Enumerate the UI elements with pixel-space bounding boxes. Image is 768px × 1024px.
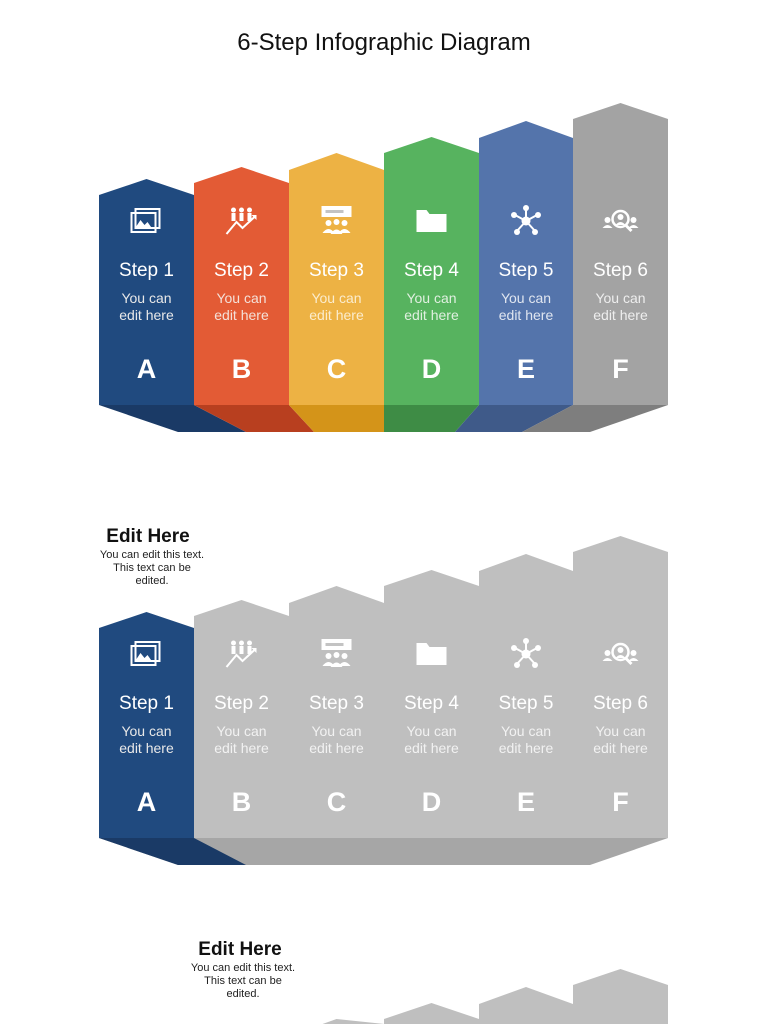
- column 3: C: [327, 787, 346, 817]
- column 6: You can: [595, 290, 646, 306]
- column 4: D: [422, 354, 441, 384]
- column 2: edit here: [214, 307, 269, 323]
- column 5: E: [517, 354, 535, 384]
- callout: edit here (step 2): Edit Here: [198, 939, 282, 960]
- callout: edit here (step 2): You can edit this text.: [191, 962, 295, 974]
- column 4: You can: [406, 290, 457, 306]
- column 5: Step 5: [499, 260, 553, 281]
- bottom shadow band: [99, 838, 668, 865]
- callout: edit here (step 1): edited.: [135, 575, 169, 587]
- column 2: B: [232, 354, 251, 384]
- column 1: Step 1: [119, 693, 174, 714]
- diagram 1: colored steps: [99, 103, 668, 432]
- column 4: [384, 570, 479, 838]
- callout: edit here (step 2): [191, 939, 295, 1000]
- column 3: Step 3: [309, 693, 364, 714]
- column 6: Step 6: [593, 260, 648, 281]
- diagram 3: partially visible: [194, 969, 668, 1024]
- column 3: C: [327, 354, 346, 384]
- column 6: edit here: [593, 307, 648, 323]
- column 2: Step 2: [214, 693, 269, 714]
- column 6: F: [612, 787, 629, 817]
- column 2: You can: [216, 290, 267, 306]
- column 4: [384, 137, 479, 405]
- column 2: You can: [216, 723, 267, 739]
- column 4: D: [422, 787, 441, 817]
- column 3: edit here: [309, 740, 364, 756]
- column 6: edit here: [593, 740, 648, 756]
- column 3: Step 3: [309, 260, 364, 281]
- column 6: You can: [595, 723, 646, 739]
- column 6: Step 6: [593, 693, 648, 714]
- column 5: Step 5: [499, 693, 553, 714]
- title: 6-Step Infographic Diagram: [237, 29, 531, 56]
- column 6: F: [612, 354, 629, 384]
- callout: edit here (step 1): This text can be: [113, 562, 191, 574]
- column 2: edit here: [214, 740, 269, 756]
- column 4: edit here: [404, 307, 459, 323]
- column 2: Step 2: [214, 260, 269, 281]
- column 5: You can: [501, 723, 551, 739]
- column 5: edit here: [499, 307, 553, 323]
- column 1: edit here: [119, 307, 174, 323]
- column 4: Step 4: [404, 260, 459, 281]
- column 3: [289, 586, 384, 838]
- callout: edit here (step 2): This text can be: [204, 975, 282, 987]
- column 1: [99, 179, 194, 405]
- column 3: [289, 153, 384, 405]
- callout: edit here (step 1): You can edit this text.: [100, 549, 204, 561]
- column 3: edit here: [309, 307, 364, 323]
- column 1: edit here: [119, 740, 174, 756]
- column 2: [194, 167, 289, 405]
- column 4: edit here: [404, 740, 459, 756]
- column 1: [99, 612, 194, 838]
- callout: edit here (step 2): edited.: [226, 988, 260, 1000]
- column 2: [194, 600, 289, 838]
- column 5: edit here: [499, 740, 553, 756]
- column 4: Step 4: [404, 693, 459, 714]
- column 5: E: [517, 787, 535, 817]
- column 3: You can: [311, 290, 362, 306]
- diagram 2: step 1 highlighted: [99, 536, 668, 865]
- column 5: [479, 554, 573, 838]
- column 1: Step 1: [119, 260, 174, 281]
- column 2: B: [232, 787, 251, 817]
- callout: edit here (step 1): [100, 526, 204, 587]
- column 3: You can: [311, 723, 362, 739]
- column 1: A: [137, 354, 156, 384]
- column 4: You can: [406, 723, 457, 739]
- column 6: [573, 536, 668, 838]
- callout: edit here (step 1): Edit Here: [106, 526, 190, 547]
- column 5: You can: [501, 290, 551, 306]
- bottom shadow band: [99, 405, 668, 432]
- column 6: [573, 103, 668, 405]
- column 1: A: [137, 787, 156, 817]
- column 1: You can: [121, 723, 172, 739]
- column 5: [479, 121, 573, 405]
- column 1: You can: [121, 290, 172, 306]
